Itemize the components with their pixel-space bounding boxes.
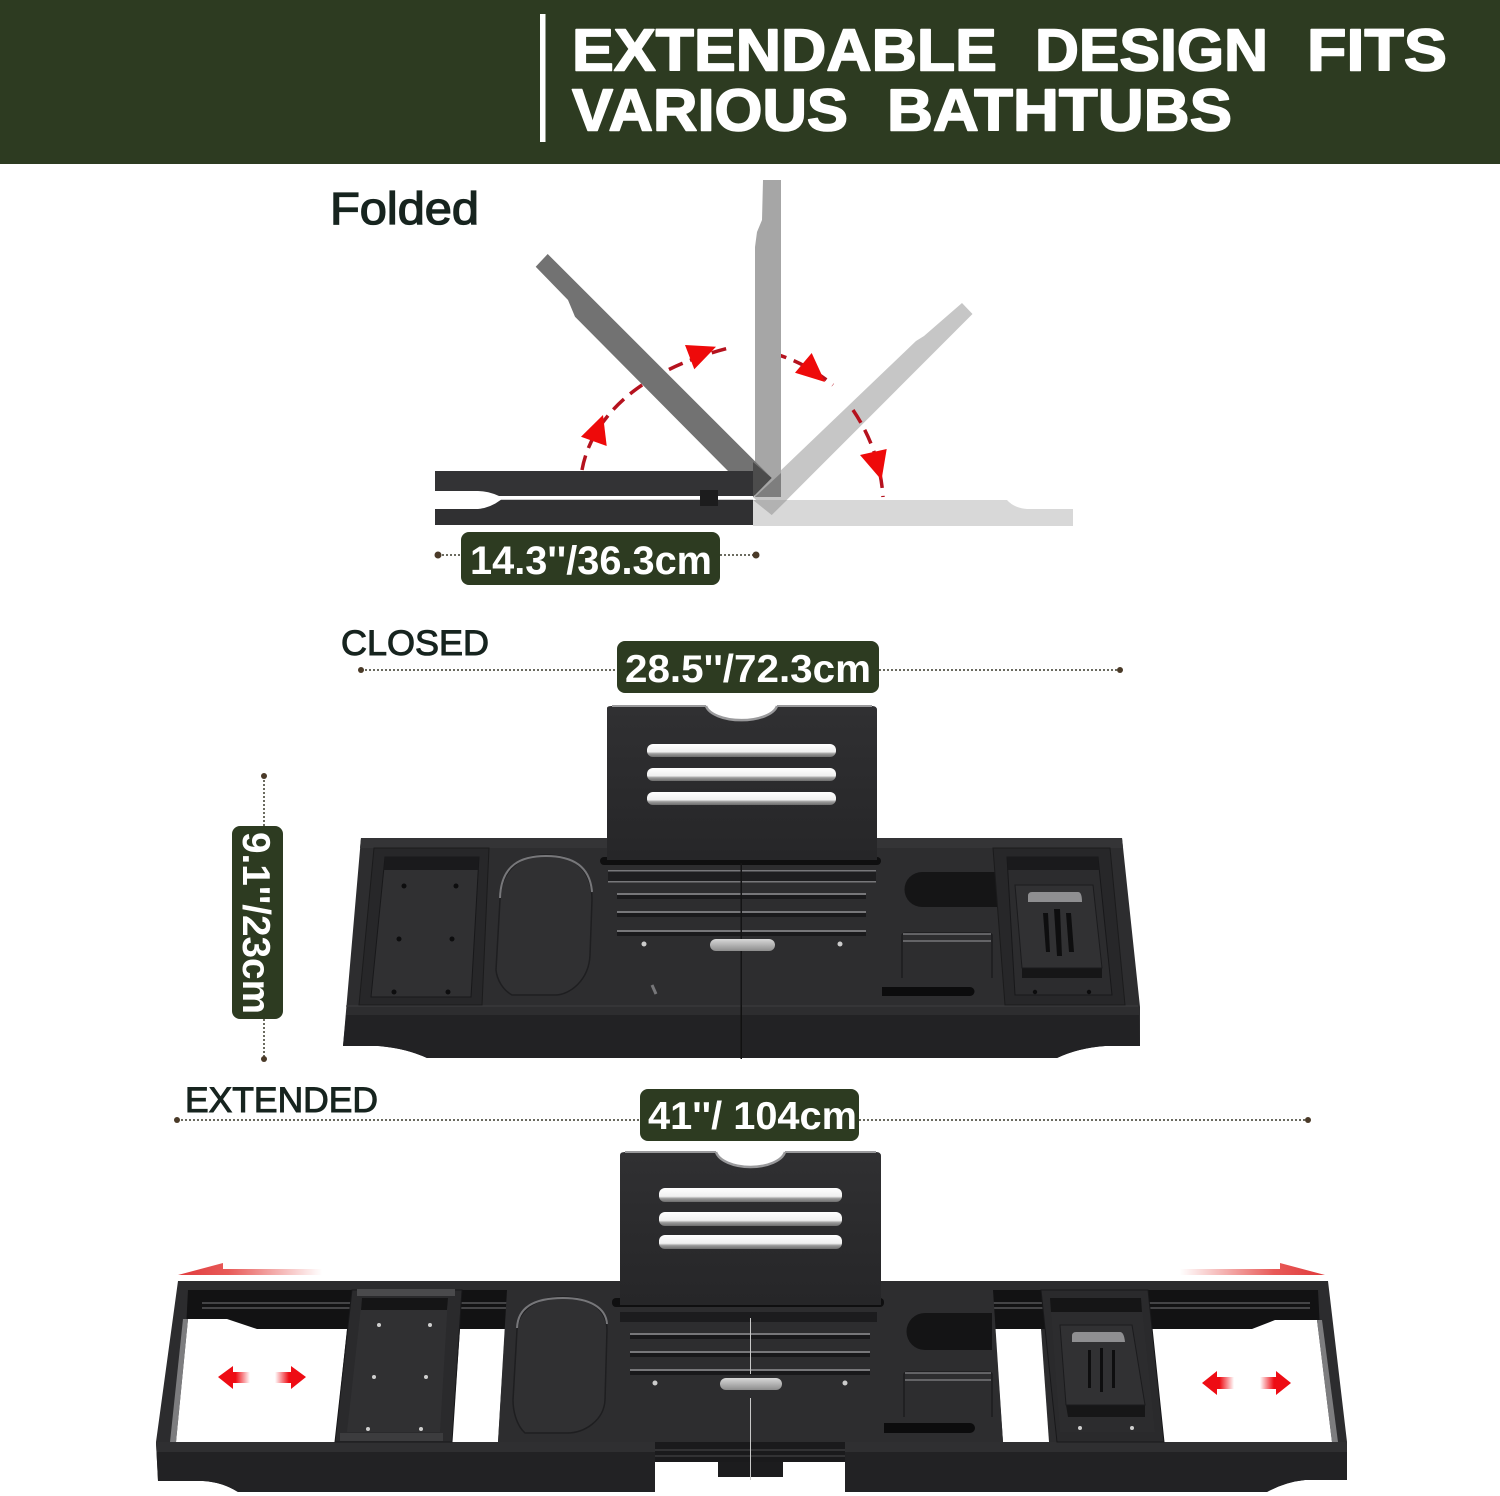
oval recess (513, 1297, 607, 1433)
tray body (343, 838, 1140, 1058)
title: VARIOUS (572, 78, 848, 144)
right sliding compartment (1041, 1290, 1164, 1442)
front face (156, 1442, 1347, 1492)
right compartment with soap dish (993, 848, 1125, 1005)
arrows: left window slide (218, 1366, 306, 1389)
white opening: inner left (452, 1329, 505, 1442)
soap dish (1015, 885, 1102, 978)
title: FITS (1307, 18, 1447, 84)
center block (498, 1290, 1003, 1480)
leg position: vertical (755, 180, 781, 497)
title: EXTENDABLE (572, 18, 997, 84)
back panel (620, 1152, 881, 1305)
title: BATHTUBS (887, 78, 1232, 144)
arrowheads (581, 345, 887, 480)
left compartment (359, 848, 489, 1005)
rail channel (186, 1290, 1320, 1329)
white opening: far left (176, 1319, 347, 1442)
folding diagram (435, 180, 1073, 526)
title: DESIGN (1035, 18, 1268, 84)
ribs and plate (612, 1298, 884, 1307)
title (572, 18, 1447, 144)
left sliding compartment (335, 1289, 462, 1442)
leg position: diagonal left (536, 254, 772, 478)
leg position: flat right (753, 500, 1073, 526)
heading: CLOSED: CLOSED (341, 624, 489, 663)
leg position: diagonal right (753, 303, 972, 515)
heading: Folded: Folded (330, 183, 479, 234)
arrow: extend right (1180, 1263, 1325, 1275)
arrows: right window slide (1202, 1371, 1291, 1395)
white opening: far right (1152, 1320, 1332, 1442)
leg position: folded dark (435, 471, 753, 496)
outer frame (156, 1281, 1347, 1492)
dimension: depth 9.1in: 9.1''/23cm (234, 832, 277, 1014)
center ribs and plate (600, 857, 881, 1005)
white opening: inner right (995, 1329, 1049, 1442)
extended caddy tray (156, 1152, 1347, 1492)
rotation arrows (582, 347, 883, 497)
tray front face (343, 1015, 1140, 1058)
oval recess (496, 855, 592, 995)
header banner (0, 0, 1500, 164)
cup and phone recess (906, 1313, 992, 1350)
dimension: closed width 28.5in (358, 641, 1123, 693)
closed caddy tray (343, 706, 1140, 1059)
panel slots (659, 1188, 842, 1249)
dimension: folded 14.3in (434, 532, 760, 585)
back panel (607, 706, 877, 860)
hinge overlap (753, 462, 772, 497)
cup cutout and phone recess (882, 872, 997, 996)
dimension: depth 9.1in (232, 773, 283, 1062)
panel slots (647, 744, 836, 805)
heading: EXTENDED: EXTENDED (185, 1081, 378, 1120)
dimension: extended width 41in (174, 1089, 1311, 1141)
dimension: closed width 28.5in: 28.5''/72.3cm (625, 648, 871, 691)
dimension: extended width 41in: 41''/ 104cm (648, 1095, 857, 1138)
arrow: extend left (178, 1263, 322, 1275)
dimension: folded 14.3in: 14.3''/36.3cm (470, 539, 712, 583)
